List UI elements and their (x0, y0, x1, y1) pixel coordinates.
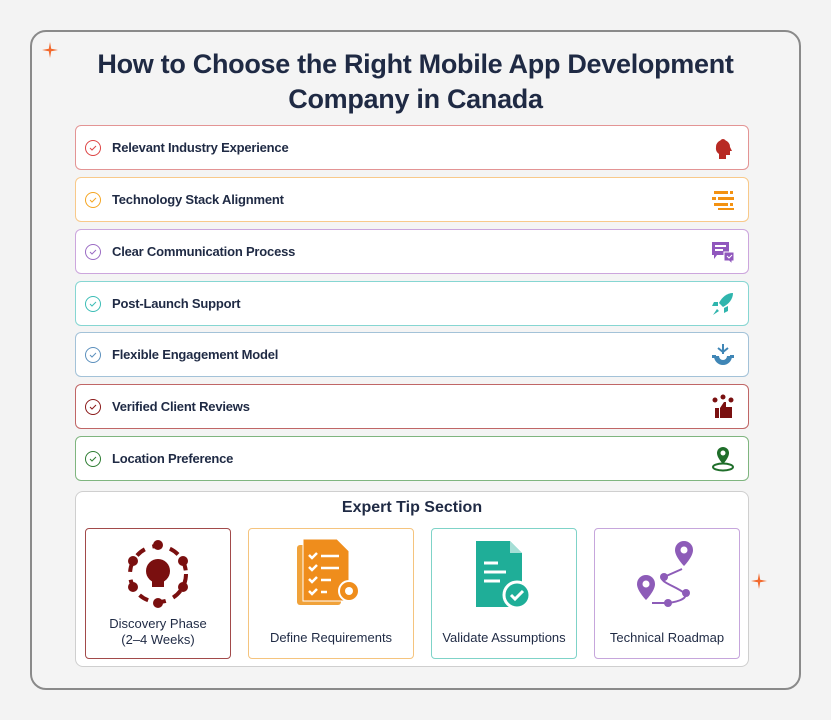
row: Verified Client Reviews: Verified Client Reviews (112, 399, 250, 414)
card: Discovery Phase: (2–4 Weeks) (121, 632, 195, 647)
card: Technical Roadmap (594, 528, 740, 659)
icon: gear network (712, 344, 734, 365)
row: Verified Client Reviews (75, 384, 749, 429)
title: Company in Canada (288, 84, 543, 114)
decorative sparkle right (751, 573, 767, 589)
row: Technology Stack Alignment (75, 177, 749, 222)
row: Flexible Engagement Model: Flexible Engagement Model (112, 347, 278, 362)
row: Location Preference: Location Preference (112, 451, 233, 466)
row: Clear Communication Process: Clear Communication Process (112, 244, 295, 259)
card: Discovery Phase (85, 528, 231, 659)
card: Validate Assumptions (431, 528, 577, 659)
heading: Expert Tip Section: Expert Tip Section (342, 499, 482, 516)
row: Technology Stack Alignment: Technology Stack Alignment (112, 192, 284, 207)
row: Post-Launch Support: Post-Launch Support (112, 296, 240, 311)
row: Relevant Industry Experience (75, 125, 749, 170)
icon: head gear (716, 139, 732, 159)
icon: location pin (712, 447, 734, 472)
card: Discovery Phase: Discovery Phase (109, 616, 207, 631)
row: Clear Communication Process (75, 229, 749, 274)
title: How to Choose the Right Mobile App Development (97, 49, 734, 79)
row: Post-Launch Support (75, 281, 749, 326)
card: Technical Roadmap: Technical Roadmap (610, 630, 724, 645)
icon: stack (712, 191, 734, 210)
title (97, 49, 734, 114)
card: Define Requirements: Define Requirements (270, 630, 392, 645)
panel: expert tip section (75, 491, 749, 667)
icon: thumbs up stars (712, 394, 734, 418)
card: Define Requirements (248, 528, 414, 659)
decorative sparkle (42, 42, 58, 58)
icon: chat (712, 242, 734, 263)
row: Flexible Engagement Model (75, 332, 749, 377)
card: Validate Assumptions: Validate Assumptions (442, 630, 566, 645)
row: Location Preference (75, 436, 749, 481)
icon: rocket (712, 293, 733, 315)
row: Relevant Industry Experience: Relevant Industry Experience (112, 140, 288, 155)
